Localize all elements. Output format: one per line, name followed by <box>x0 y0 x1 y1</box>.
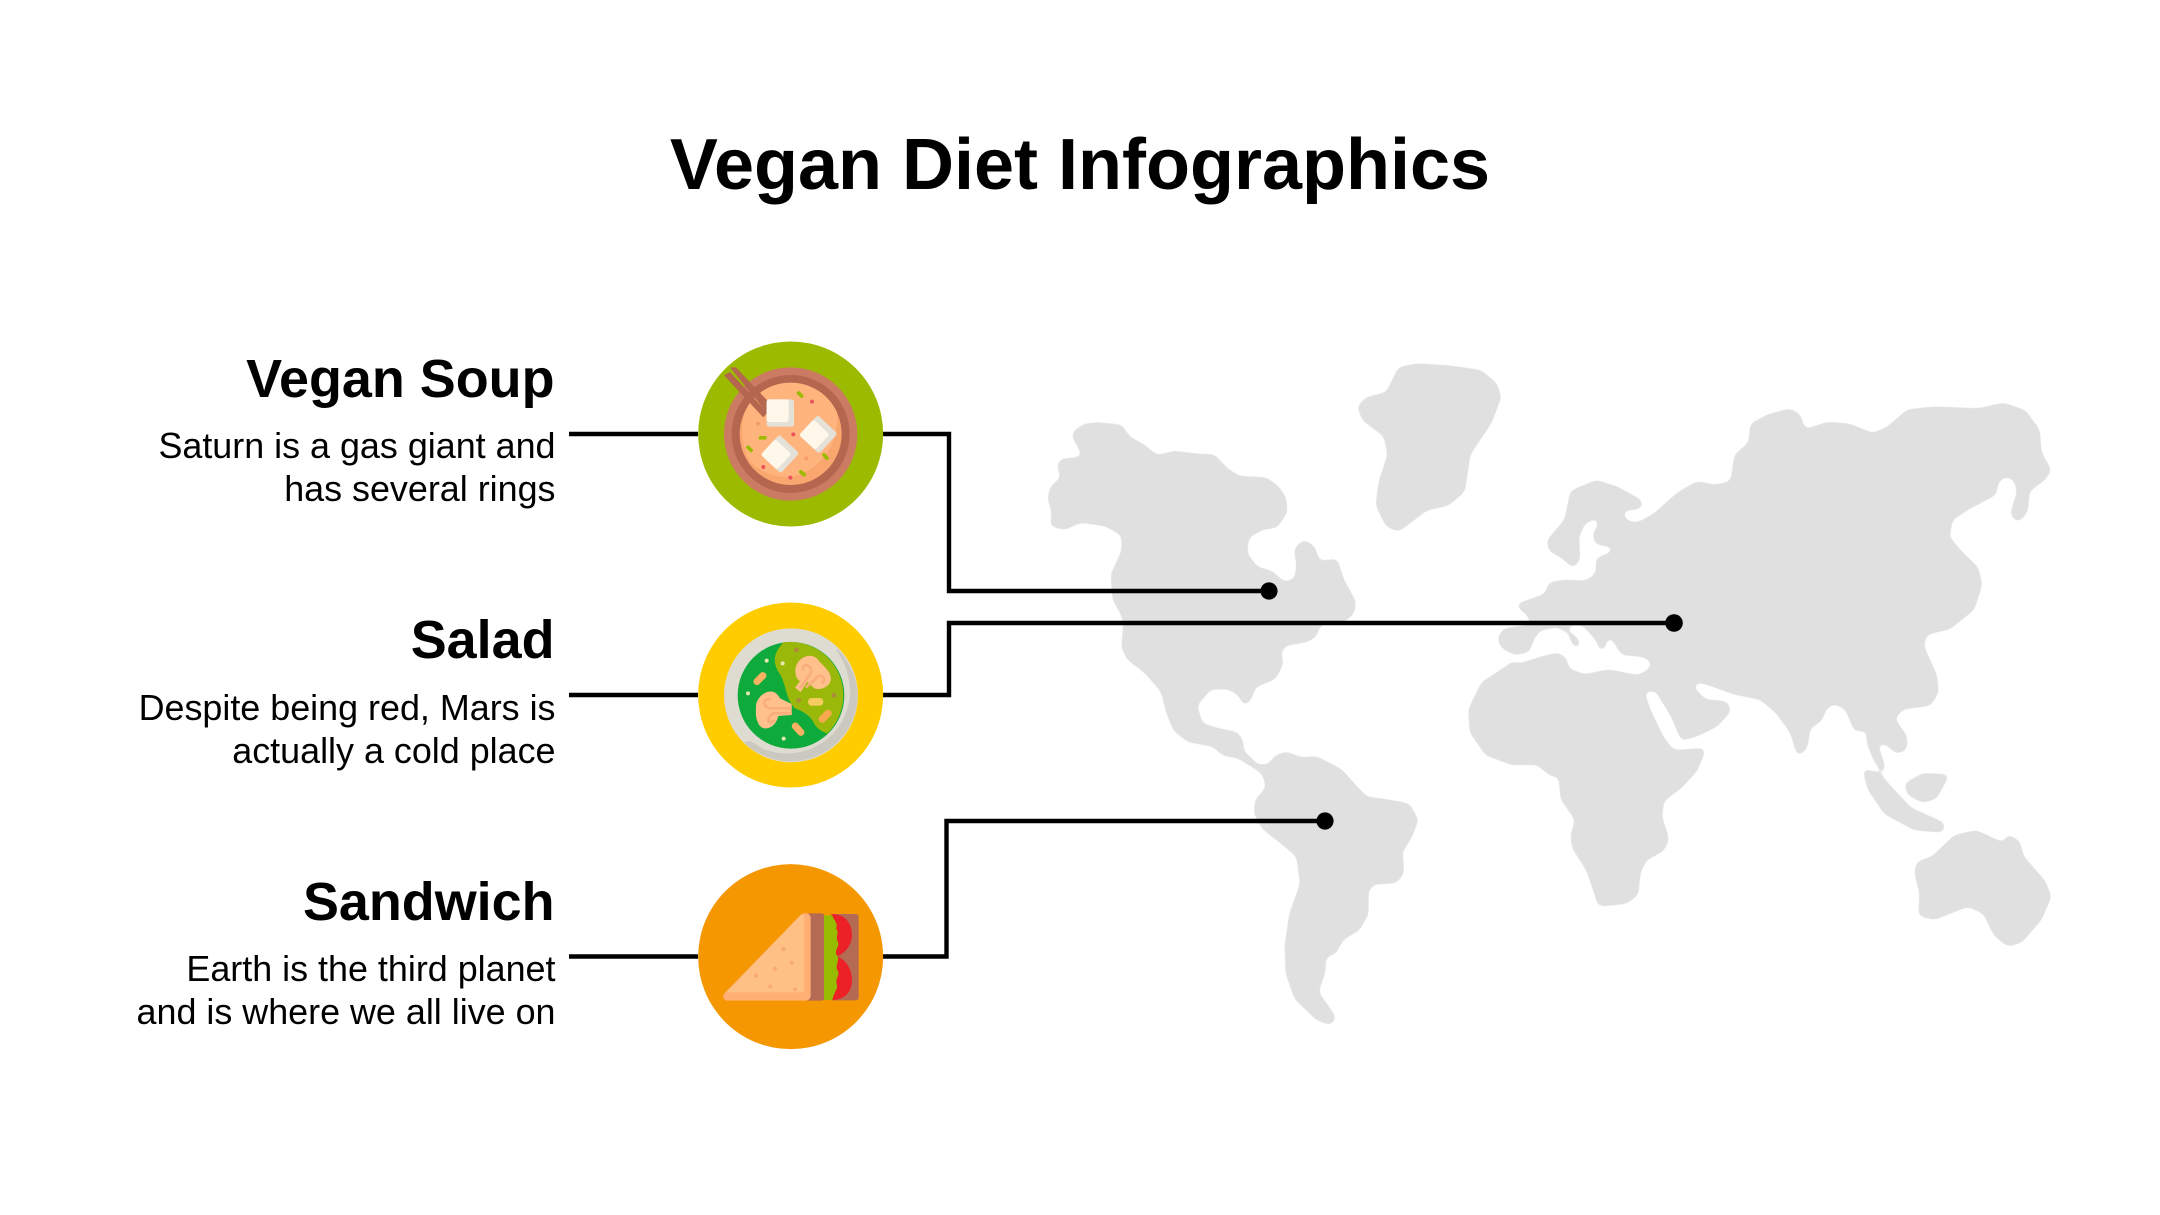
text block: Salad: Salad <box>411 610 554 670</box>
text block: Salad: Despite being red, Mars is <box>139 688 556 728</box>
icon: vegan soup bowl <box>698 341 883 526</box>
text block: Salad: actually a cold place <box>232 731 556 771</box>
connector: Salad to Asia <box>569 614 1683 695</box>
connector: Sandwich to South America <box>569 812 1334 956</box>
text block: Vegan Soup: Vegan Soup <box>246 349 554 409</box>
title: Vegan Diet Infographics <box>670 125 1490 205</box>
text block: Vegan Soup: Saturn is a gas giant and <box>158 426 556 466</box>
map: Eurasia, Africa and Oceania <box>1469 403 2051 946</box>
text block: Sandwich: and is where we all live on <box>137 992 556 1032</box>
connector: Vegan Soup to North America <box>569 434 1278 600</box>
world map <box>1048 364 2051 1025</box>
icon: salad plate <box>698 602 883 787</box>
text block: Sandwich: Sandwich <box>303 872 554 932</box>
text block: Sandwich: Earth is the third planet <box>186 949 556 989</box>
icon: sandwich <box>698 864 883 1049</box>
text block: Vegan Soup: has several rings <box>284 469 556 509</box>
text block: Sandwich <box>137 872 556 1032</box>
map: the Americas and Greenland <box>1048 364 1501 1025</box>
text block: Vegan Soup <box>158 349 556 509</box>
text block: Salad <box>139 610 556 771</box>
